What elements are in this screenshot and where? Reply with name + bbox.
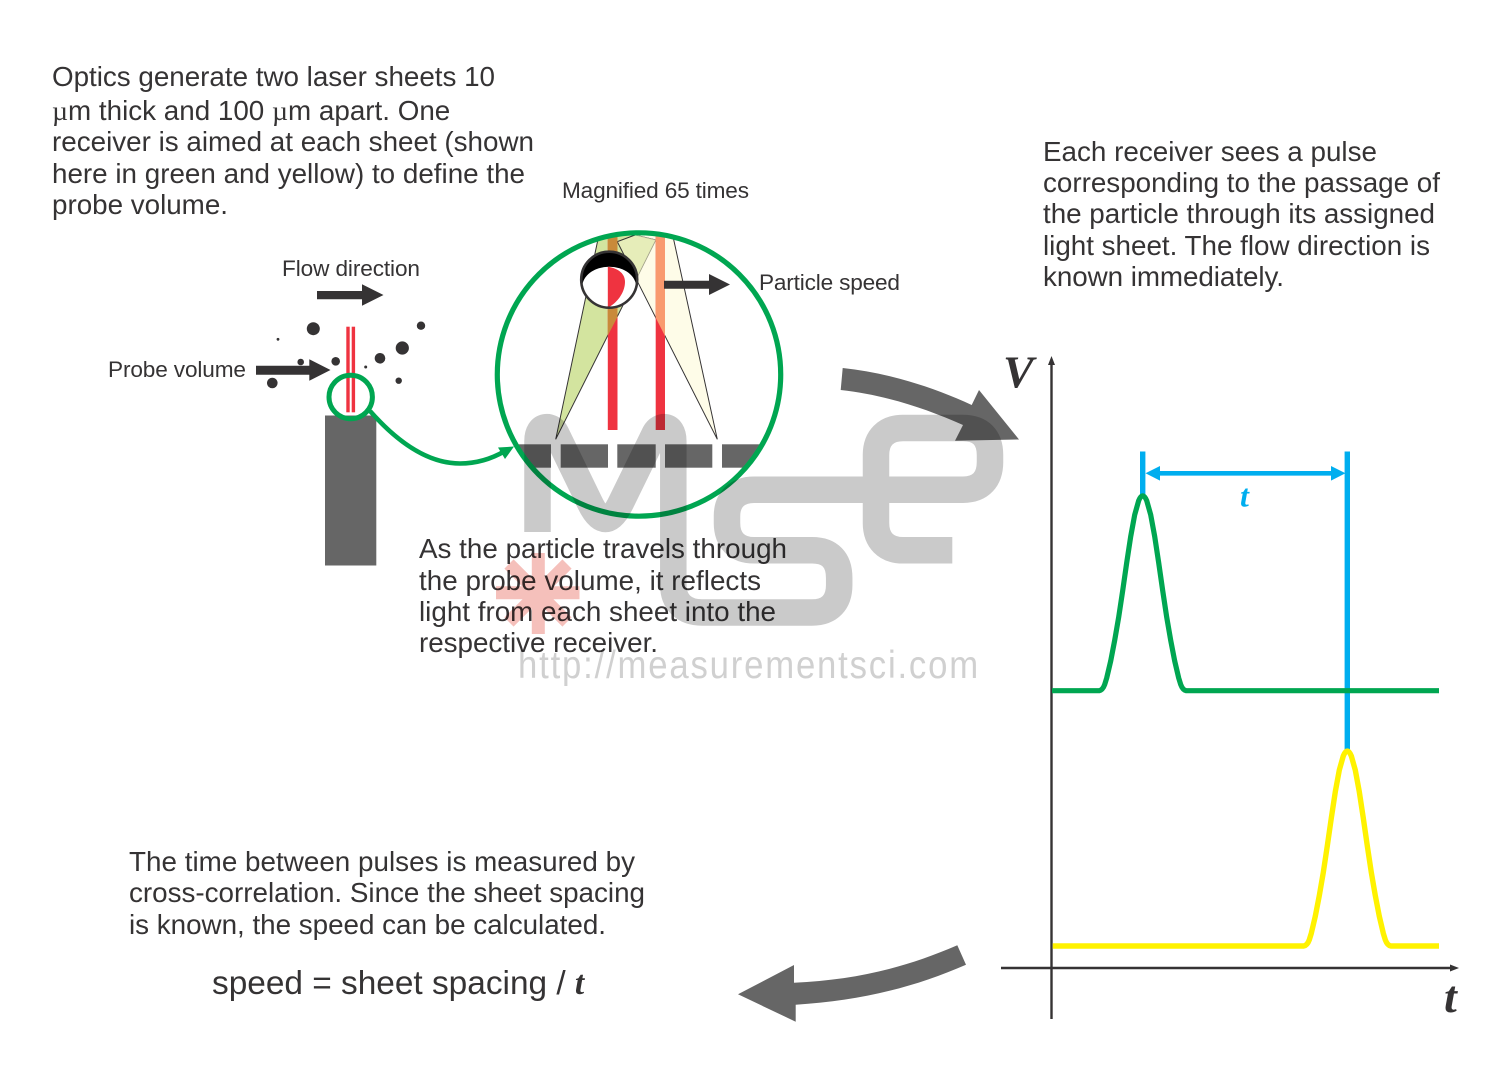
time interval double arrow xyxy=(1146,466,1346,481)
time interval marker lines xyxy=(1140,452,1350,752)
watermark logo MSe xyxy=(538,427,990,612)
formula: speed = sheet spacing / t xyxy=(212,965,586,1002)
text: optics description: µm thick and 100 µm apart. One xyxy=(52,95,450,127)
receiver cone: green xyxy=(556,225,656,439)
text: receiver pulse description: corresponding to the passage of xyxy=(1043,167,1440,198)
text: optics description xyxy=(52,61,534,220)
laser sheet 1 xyxy=(608,225,618,430)
laser sheet 2 xyxy=(656,225,665,430)
label: flow direction: Flow direction xyxy=(282,256,420,281)
text: cross-correlation description xyxy=(129,846,645,940)
arrow: curved to graph xyxy=(841,368,1019,441)
text: particle travel description: respective receiver. xyxy=(419,627,658,658)
magnifier ring xyxy=(497,233,781,516)
text: particle travel description: As the particle travels through xyxy=(419,533,787,564)
probe volume circle xyxy=(329,375,372,419)
watermark asterisk xyxy=(496,553,580,634)
text: optics description: probe volume. xyxy=(52,189,228,220)
x axis xyxy=(1001,964,1459,972)
arrow: particle speed xyxy=(664,274,730,295)
mini laser sheets xyxy=(346,327,355,412)
text: receiver pulse description: Each receiver sees a pulse xyxy=(1043,136,1377,167)
text: cross-correlation description: is known, the speed can be calculated. xyxy=(129,909,606,940)
arrow: flow direction xyxy=(317,284,384,306)
green pulse xyxy=(1052,496,1439,691)
receiver apertures xyxy=(505,444,772,468)
label: probe volume: Probe volume xyxy=(108,357,246,382)
particle xyxy=(581,252,637,308)
probe body xyxy=(325,416,376,566)
graph xyxy=(1001,346,1459,1022)
magnified contents clipped to circle xyxy=(518,235,760,468)
connector arrow to magnified view xyxy=(370,411,514,464)
axis label V: V xyxy=(1003,346,1037,398)
sheet 1 through green cone xyxy=(608,225,618,336)
text: particle travel description: light from each sheet into the xyxy=(419,596,776,627)
text: optics description: Optics generate two laser sheets 10 xyxy=(52,61,495,92)
text: receiver pulse description: light sheet. The flow direction is xyxy=(1043,230,1430,261)
arrow: probe volume pointer xyxy=(256,359,330,381)
arrow: curved to formula xyxy=(738,945,966,1022)
label: particle speed: Particle speed xyxy=(759,270,900,295)
watermark xyxy=(496,427,990,686)
yellow cone inner edge xyxy=(618,235,635,255)
text: cross-correlation description: cross-correlation. Since the sheet spacing xyxy=(129,877,645,908)
y axis xyxy=(1048,356,1055,1019)
text: receiver pulse description: the particle through its assigned xyxy=(1043,198,1435,229)
magnified view xyxy=(497,225,781,516)
watermark url: http://measurementsci.com xyxy=(518,643,978,686)
text: particle travel description: the probe volume, it reflects xyxy=(419,565,761,596)
text: receiver pulse description: known immediately. xyxy=(1043,261,1284,292)
text: cross-correlation description: The time between pulses is measured by xyxy=(129,846,635,877)
text: particle travel description xyxy=(419,533,787,658)
particles xyxy=(267,322,425,388)
time label t: t xyxy=(1240,478,1250,514)
axis label t: t xyxy=(1444,971,1458,1022)
text: receiver pulse description xyxy=(1043,136,1440,292)
cone overlap xyxy=(617,235,656,279)
label: magnified 65 times: Magnified 65 times xyxy=(562,178,749,203)
text: optics description: receiver is aimed at each sheet (shown xyxy=(52,126,534,157)
text: optics description: here in green and yellow) to define the xyxy=(52,158,525,189)
receiver cone: yellow xyxy=(638,236,718,440)
sheet 2 through yellow cone xyxy=(656,225,665,336)
yellow pulse xyxy=(1053,751,1439,946)
